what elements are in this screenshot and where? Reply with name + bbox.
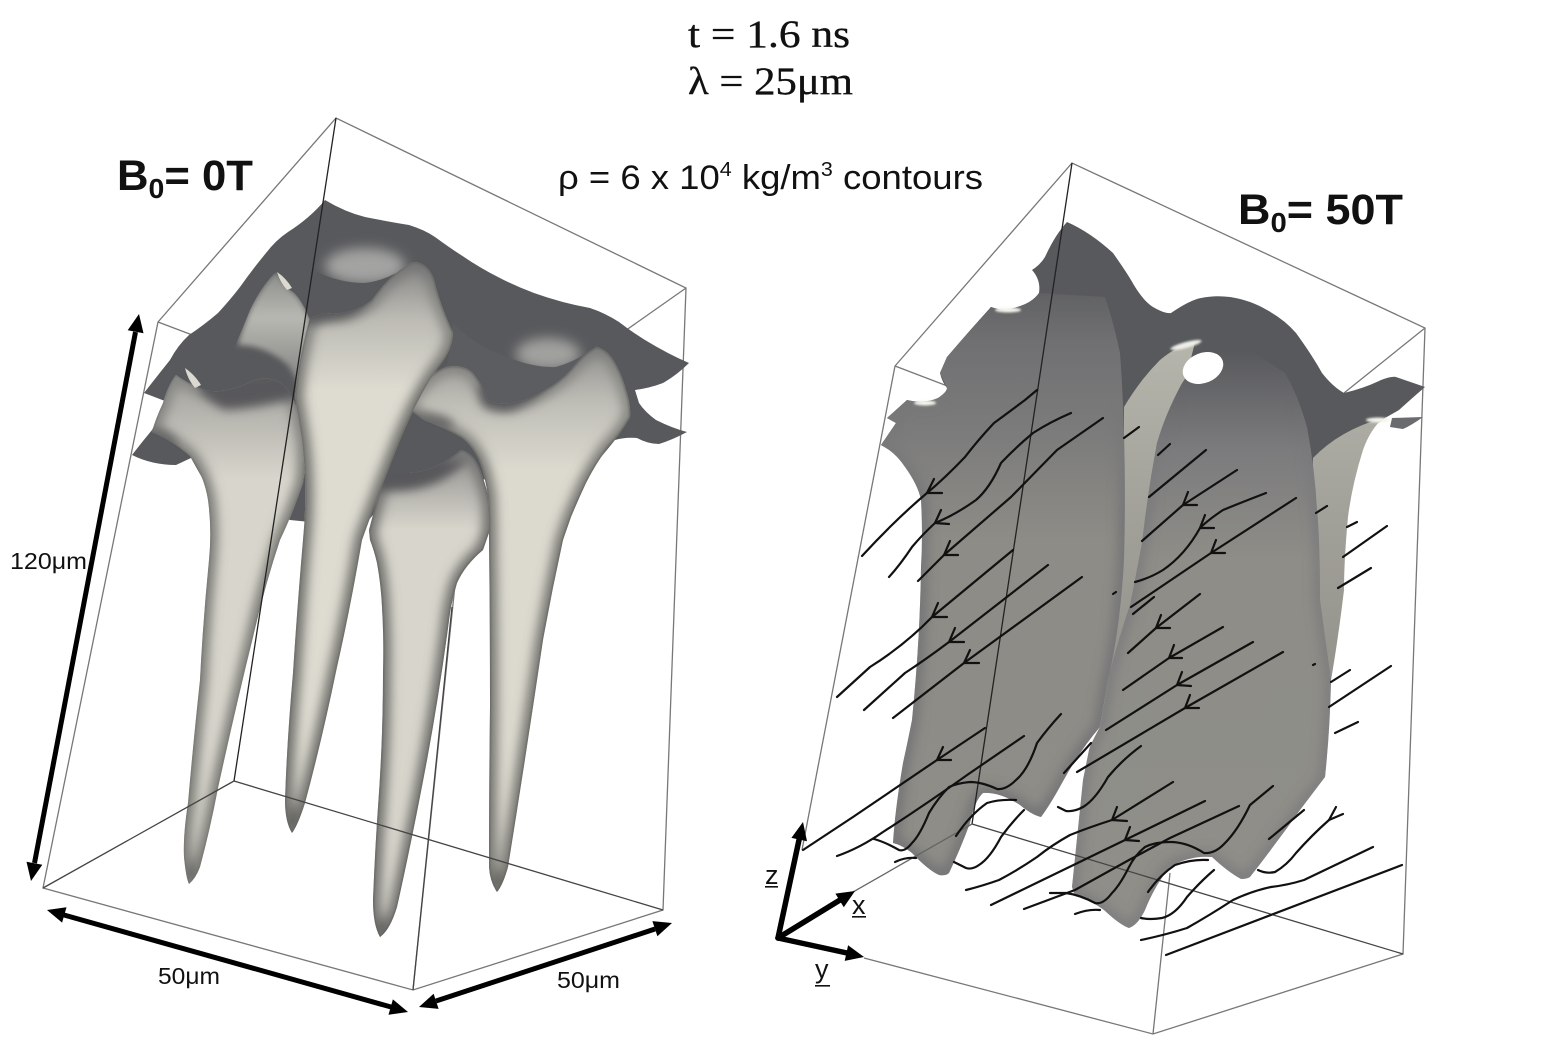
- axis labels: x: [852, 890, 866, 920]
- left column: [881, 293, 1125, 875]
- spike D: [397, 347, 630, 892]
- contour caption: ρ = 6 x 10: [558, 159, 709, 197]
- right lit strip: [1300, 418, 1383, 777]
- hole in surface: [1170, 338, 1228, 390]
- magnetic field lines with arrowheads: [803, 390, 1402, 955]
- heading: B0 = 50T: = 50T: [1287, 186, 1403, 234]
- heading: B0 = 50T: B: [1238, 186, 1269, 234]
- density surface sheet, left: [132, 200, 689, 522]
- spike C: [369, 450, 490, 937]
- axis labels: z: [765, 860, 778, 890]
- small tips poking through surface: [185, 272, 292, 388]
- axis labels: [765, 860, 866, 987]
- heading: B0 = 0T: B: [117, 152, 148, 200]
- panel: B0 = 0T simulation: [43, 118, 689, 990]
- contour caption: 4: [720, 159, 732, 181]
- heading: B0 = 50T: 0: [1270, 207, 1287, 238]
- dimension label: 50 micron front: 50μm: [158, 963, 220, 989]
- contour caption: 3: [821, 159, 833, 181]
- axis triad: [765, 822, 866, 987]
- bounding box front edges, left: [43, 118, 663, 990]
- right column: [1072, 350, 1331, 928]
- title: time and wavelength: t = 1.6 ns: [688, 13, 850, 56]
- contour caption: contours: [833, 159, 983, 197]
- panel: B0 = 50T simulation: [802, 163, 1425, 1034]
- lit patches on surface: [300, 248, 630, 420]
- back dome, left: [238, 272, 310, 395]
- title: time and wavelength: λ = 25μm: [688, 60, 853, 103]
- middle lit strip between columns: [1108, 342, 1195, 680]
- heading: B0 = 0T: 0: [149, 173, 164, 204]
- dimension label: 50 micron side: 50μm: [557, 967, 620, 993]
- bounding box back edges, right: [802, 163, 1425, 1034]
- highlights at surface notches: [914, 308, 1390, 422]
- heading: B0 = 0T: = 0T: [164, 152, 253, 200]
- density surface sheet, right: [881, 222, 1425, 560]
- small sheet fragment at right corner: [1390, 417, 1423, 429]
- dimension arrow: 50 micron front: [47, 907, 408, 1015]
- title: time and wavelength: [688, 13, 853, 103]
- axis labels: y: [815, 954, 829, 984]
- bounding box front edges, right: [853, 163, 1403, 954]
- dimension label: 120 micron: 120μm: [10, 548, 87, 574]
- spike B: [285, 262, 453, 833]
- dimension arrow: 120 micron: [26, 314, 144, 881]
- dimension arrow: 50 micron side: [419, 921, 672, 1009]
- contour caption: kg/m: [732, 159, 821, 197]
- bounding box back edges, left: [43, 118, 686, 990]
- spike A: [152, 375, 304, 884]
